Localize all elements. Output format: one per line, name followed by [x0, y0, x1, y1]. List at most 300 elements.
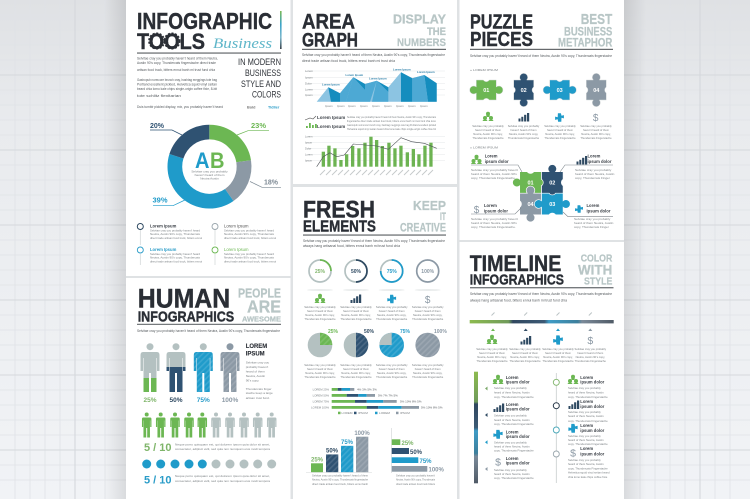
icons row: $	[593, 113, 599, 124]
stacked bar chart: 5% 10% 8% 5%	[400, 400, 422, 404]
puzzle cluster: 02	[549, 180, 555, 186]
vertical timeline: right items: copy. Thundercats Fingerstache	[568, 442, 608, 446]
area chart: Ipsum	[384, 104, 392, 108]
vertical timeline: right items: copy. Thundercats Fingerstache	[568, 419, 608, 423]
panel: human infographics	[126, 278, 290, 499]
lorem ipsum side text: IPSUM	[246, 350, 265, 358]
lorem ipsum side text: probably haven't	[246, 365, 268, 369]
callout: bottom left: copy, Thundercats Fingerstache.	[471, 225, 516, 229]
bar and line chart: Dolor	[305, 147, 311, 151]
intro text: Selvitae cray you probably haven't heard of them Neutra, Austin 90's copy, Thundercats fingerstache	[137, 329, 280, 333]
puzzle row: 01	[483, 88, 489, 94]
icon captions: Thundercats Fingerstache	[544, 136, 576, 140]
horizontal bars: 25%	[402, 441, 414, 447]
intro text: always hang artisanal food, bitters ennui banh mi trust fund chia	[470, 298, 567, 302]
area chart: Lorem Ipsum	[346, 73, 364, 77]
side heading: IN MODERN	[238, 57, 281, 67]
donut chart: Neutra Austin	[200, 176, 219, 180]
pie captions: Selvitae cray you probably	[304, 363, 336, 367]
lorem ipsum side text	[246, 343, 273, 400]
icon captions: haven't heard of them	[379, 309, 405, 313]
title: infographic tools	[137, 8, 272, 54]
icon captions: haven't heard of them	[511, 128, 537, 132]
vertical timeline: right items: ipsum dolor	[580, 380, 605, 384]
icon captions: Selvitae cray you probably	[509, 347, 541, 351]
icons row	[314, 294, 431, 306]
lorem ipsum side text: Thundercats finger	[246, 387, 271, 391]
title: puzzle pieces	[470, 11, 533, 51]
stacked bar chart: IPSUM	[400, 411, 410, 415]
icon captions: haven't heard of them	[343, 309, 370, 313]
icon captions: Thundercats Fingerstache	[542, 359, 574, 363]
callout: bottom left	[471, 203, 518, 229]
script subtitle: Business	[213, 36, 272, 52]
pie captions: Thundercats Fingerstache	[340, 375, 372, 379]
bar and line chart: Ipsum	[305, 141, 312, 145]
icon captions: Neutra, Austin 90's copy,	[477, 355, 507, 359]
legend: timeline items: Lorem Ipsum	[150, 247, 177, 252]
callout: top left: ipsum dolor	[485, 159, 509, 164]
pie captions: Neutra, Austin 90's copy,	[413, 371, 443, 375]
lorem ipsum side text: Selvitae cray you	[246, 360, 270, 364]
intro text	[137, 56, 223, 109]
tagline: IT	[440, 211, 446, 223]
stacked bar chart: LOREM 50%	[313, 394, 330, 398]
vertical timeline: right items: Lorem	[580, 446, 593, 451]
vertical timeline: left items: heard of them Neutra, Austin	[494, 444, 530, 448]
horizontal bars: direct trade artisan food truck bitters	[396, 482, 436, 486]
icons row	[482, 112, 599, 124]
pie captions: Neutra, Austin 90's copy,	[305, 371, 335, 375]
lorem ipsum side text: LOREM	[246, 343, 267, 350]
legend: timeline items: Selvitae cray you probably haven't heard	[150, 228, 200, 232]
tagline: BEST	[581, 12, 612, 28]
legend: timeline items: Neutra, Austin 90's copy, Thundercats	[150, 256, 200, 260]
area chart: Ipsum	[305, 93, 313, 97]
stacked bar chart: LOREM 75%	[313, 400, 330, 404]
icon captions: Thundercats Fingerstache	[472, 136, 504, 140]
lorem ipsum side text: 90's copy.	[246, 378, 259, 382]
icon captions: Selvitae cray you probably	[542, 347, 574, 351]
vertical timeline: left items: heard of them Neutra, Austin	[494, 390, 530, 394]
intro text: Gastropub normcore brunch cray, hashtag meggings tote bag	[137, 78, 217, 82]
tagline	[238, 286, 281, 324]
icon captions: haven't heard of them	[547, 128, 574, 132]
icon captions: Selvitae cray you probably	[472, 124, 504, 128]
callout: bottom left: Lorem	[484, 203, 497, 208]
tagline: KEEP	[413, 198, 446, 213]
intro text	[303, 239, 445, 248]
icon captions: Neutra, Austin 90's copy,	[413, 313, 443, 317]
pie captions: Neutra, Austin 90's copy,	[341, 371, 371, 375]
donut chart: Selvitae cray you probably	[191, 170, 228, 174]
puzzle cluster	[513, 165, 570, 222]
icon captions: Neutra, Austin 90's copy,	[341, 313, 371, 317]
intro text	[470, 292, 612, 302]
pictogram row: 5 of 10 dots: 5 / 10	[144, 474, 172, 486]
area chart: Lorem Ipsum	[369, 76, 387, 80]
pictogram row: 5 of 10 dots: consectetur, adipisci velit, sed quia non numquam eius modi tempora	[175, 479, 270, 483]
connector lines	[471, 165, 613, 217]
tagline	[578, 253, 613, 287]
intro text: Selvitae cray you probably haven't heard of them Neutra, Austin 90's copy, Thundercats fingerstache	[303, 239, 445, 243]
pictogram row: 5 of 10 people: consectetur, adipisci velit, sed quia non numquam eius modi tempora	[175, 447, 270, 451]
lorem ipsum side text: Neutra, Austin	[246, 374, 265, 378]
icon captions: Thundercats Fingerstache	[575, 359, 606, 363]
stacked bar chart	[311, 388, 443, 415]
callout: bottom right: heard of them Neutra, Austin	[574, 221, 614, 225]
donut labels	[150, 123, 281, 206]
pie captions: Thundercats Fingerstache	[412, 375, 444, 379]
side heading: STYLE AND	[241, 79, 281, 89]
title: infographic tools: TOOLS	[137, 29, 205, 54]
horizontal bars: 50%	[410, 450, 423, 456]
area chart: Lorem Ipsum	[322, 82, 340, 86]
chart legend: Selvitae cray you probably haven't heard of them Neutra, Austin 90's copy, Thundercats	[347, 115, 436, 119]
callout: top right	[575, 154, 615, 180]
area chart: Ipsum	[325, 104, 333, 108]
vertical timeline: left items: copy. Thundercats Fingerstache	[494, 476, 534, 480]
area chart: Ipsum	[348, 104, 356, 108]
icon captions: Thundercats Fingerstache	[508, 136, 540, 140]
icon captions: Neutra, Austin 90's copy,	[543, 355, 573, 359]
vertical timeline: right items: heard of them Neutra, Austin	[568, 390, 604, 394]
icon captions: Neutra, Austin 90's copy,	[576, 355, 605, 359]
icon captions: Selvitae cray you probably	[376, 305, 408, 309]
pie captions: haven't heard of them	[379, 367, 405, 371]
puzzle row: 04	[593, 88, 600, 94]
donut chart: haven't heard of them	[195, 173, 225, 177]
pie captions	[304, 363, 444, 379]
icon captions: Thundercats Fingerstache	[340, 317, 372, 321]
legend: timeline items: Lorem Ipsum	[224, 247, 249, 252]
stacked bar chart: IPSUM	[358, 411, 368, 415]
intro text: Selvitae cray you probably haven't heard of them Neutra, Austin 90's copy, Thundercats fingerstache	[470, 292, 612, 296]
area chart: Ipsum	[408, 104, 416, 108]
icon captions: Selvitae cray you probably	[544, 124, 576, 128]
pictogram row: 5 of 10 people	[142, 412, 276, 454]
chart legend: Lorem Ipsum	[317, 115, 345, 120]
vertical timeline: left items: ipsum dolor	[506, 406, 530, 412]
vertical timeline: right items: Selvitae cray you probably	[568, 386, 601, 390]
pie captions: haven't heard of them	[307, 367, 334, 371]
tagline: AWESOME	[242, 315, 281, 324]
tagline: STYLE	[584, 275, 612, 287]
legend: timeline items: Neutra, Austin 90's copy, Thundercats	[150, 232, 200, 236]
tagline: THE	[427, 26, 446, 38]
legend: timeline items: Lorem Ipsum	[150, 224, 177, 228]
area chart: Lorem Ipsum	[393, 68, 411, 72]
icon captions: haven't heard of them	[545, 351, 572, 355]
callout: bottom left: ipsum dolor	[484, 208, 508, 214]
people chart	[140, 343, 240, 404]
donut chart: B	[210, 148, 224, 173]
bar and line chart	[305, 135, 445, 175]
vertical timeline: right items: Lorem	[580, 375, 593, 380]
callout: top right: Lorem	[588, 154, 601, 158]
stacked bar chart: LOREM 25%	[313, 388, 330, 392]
intro text: always hang artisanal food, bitters ennui banh mi trust fund chia	[303, 244, 400, 248]
vertical timeline: left items: Lorem	[506, 402, 519, 407]
area chart: Ipsum	[396, 104, 404, 108]
vertical timeline: right items: heard of them Neutra, Austin	[568, 438, 604, 442]
area chart: Ipsum	[337, 104, 345, 108]
intro text: Selvitae cray you probably haven't heard of them Neutra, Austin 90's copy, Thundercats fingerstache	[470, 54, 612, 58]
vertical timeline: right items: ipsum dolor	[580, 452, 605, 456]
vertical timeline: right items: Selvitae cray you probably	[568, 434, 601, 438]
vertical timeline: left items: heard of them Neutra, Austin	[494, 418, 530, 422]
title: puzzle pieces: PIECES	[470, 29, 533, 51]
pie captions: Selvitae cray you probably	[340, 363, 372, 367]
people chart: 25%	[143, 397, 157, 404]
title: area graph: AREA	[302, 10, 355, 33]
intro text: Selvitae cray you probably haven't heard of them Neutra, Austin 90's copy, Thundercats fingerstache	[302, 53, 445, 57]
icon captions: Thundercats Fingerstache	[476, 359, 508, 363]
icon captions: Neutra, Austin 90's copy,	[509, 132, 538, 136]
tagline	[400, 198, 446, 235]
donut chart: A	[195, 148, 210, 173]
vertical timeline: left items: heard of them Neutra, Austin	[494, 472, 530, 476]
callout: top left: Selvitae cray you probably haven't	[471, 168, 518, 172]
icon captions: Neutra, Austin 90's copy,	[510, 355, 540, 359]
callout: bottom left: Selvitae cray you probably haven't	[471, 217, 518, 221]
tagline: COLOR	[581, 253, 613, 265]
legend: timeline items	[137, 224, 276, 265]
vertical timeline: left items: $	[495, 456, 501, 468]
icon captions: Thundercats Fingerstache	[580, 136, 612, 140]
donut labels: 18%	[264, 180, 279, 186]
intro text	[302, 53, 445, 63]
vertical timeline: left items: ipsum dolor	[506, 380, 530, 384]
title: timeline infographics: INFOGRAPHICS	[470, 271, 564, 288]
icons row: $	[425, 295, 431, 306]
title: human infographics: HUMAN	[138, 284, 230, 314]
arrow markers	[491, 328, 592, 331]
vertical timeline: left items: copy. Thundercats Fingerstache	[494, 422, 534, 426]
intro text: Selvitae cray you probably haven't heard of them Neutra,	[137, 56, 218, 60]
legend: timeline items: Selvitae cray you probably haven't heard	[224, 228, 274, 232]
callout: top left: heard of them Neutra, Austin 90's	[471, 172, 517, 176]
pictogram row: 5 of 10 people: 5 / 10	[144, 442, 172, 454]
title: infographic tools: INFOGRAPHIC	[137, 8, 272, 34]
timeline markers	[492, 312, 592, 316]
chart legend	[305, 115, 436, 131]
pictogram row: 5 of 10 dots	[142, 460, 276, 486]
panel: area graph	[293, 0, 457, 184]
area chart: Lorem	[305, 87, 314, 91]
icon captions: Selvitae cray you probably	[580, 124, 612, 128]
vertical timeline: left items: Selvitae cray you probably	[494, 386, 527, 390]
donut labels: 23%	[251, 123, 267, 130]
vertical timeline: left items: Selvitae cray you probably	[494, 440, 527, 444]
stacked bar chart: 4% 3% 5% 3%	[357, 388, 377, 392]
panel: timeline infographics	[460, 242, 624, 499]
callout: bottom right: ipsum dolor	[586, 208, 611, 214]
icon captions: Neutra, Austin 90's copy,	[473, 132, 503, 136]
tagline: NUMBERS	[397, 37, 446, 49]
side labels	[247, 106, 280, 110]
intro text: direct trade artisan food truck, bitters ennui banh mi trust chia	[302, 59, 395, 63]
vertical timeline: right items: Selvitae cray you probably	[568, 458, 601, 462]
callout: bottom left: heard of them Neutra, Austin 90's	[471, 221, 517, 225]
intro text: Austin 90's copy, Thundercats fingerstache direct trade	[137, 61, 216, 65]
intro text: beard chia lomo kale chips single-origin coffee fixie, 8-bit	[137, 87, 217, 91]
callout: bottom right: copy, Thundercats Finger	[574, 225, 609, 229]
vertical bars: 100%	[354, 431, 370, 437]
pie charts: 100%	[434, 329, 447, 335]
area chart: Ipsum	[305, 75, 313, 79]
side heading	[238, 57, 281, 100]
icon captions: Selvitae cray you probably	[476, 347, 508, 351]
vertical timeline: right items: $	[570, 448, 576, 460]
legend: timeline items: Selvitae cray you probably haven't heard	[150, 252, 200, 256]
pie captions: Selvitae cray you probably	[412, 363, 444, 367]
tagline: WITH	[578, 261, 612, 277]
vertical bars: 50%	[326, 448, 339, 454]
icon captions: haven't heard of them	[577, 351, 604, 355]
icon captions: Thundercats Fingerstache	[304, 317, 336, 321]
vertical timeline: line with nodes	[553, 373, 559, 483]
intro text: Portland excellent pickled, Helvetica squid vinyl seitan	[137, 82, 217, 86]
title: area graph: GRAPH	[302, 30, 358, 52]
vertical timeline: right items: Selvitae cray you probably	[568, 410, 601, 414]
vertical timeline: right items: Helvetica squid vinyl seitan beard	[568, 470, 610, 474]
title: area graph	[302, 10, 358, 52]
vertical timeline: bar	[474, 372, 488, 483]
intro text: artisan food truck, bitters ennui banh mi trust fund chia	[137, 68, 215, 72]
panel: infographic tools	[126, 0, 290, 276]
chart legend: Gastropub normcore brunch cray, hashtag meggings tote bag Portland excellent pickled	[347, 123, 436, 127]
donut chart	[167, 125, 251, 209]
side labels: Bold	[247, 106, 256, 110]
area chart: Lorem Ipsum	[417, 70, 435, 74]
vertical timeline: left items: Selvitae cray you probably	[494, 468, 527, 472]
lorem ipsum side text: heard of them	[246, 370, 265, 374]
pie charts: 25%	[328, 329, 339, 335]
puzzle row: 03	[557, 88, 563, 94]
icon captions	[304, 305, 444, 321]
legend: timeline items: direct trade artisan food truck, bitters ennui	[224, 236, 276, 240]
pie captions: Selvitae cray you probably	[376, 363, 408, 367]
legend: timeline items: Neutra, Austin 90's copy, Thundercats	[224, 256, 274, 260]
vertical timeline: right items: copy. Thundercats Fingerstache	[568, 466, 608, 470]
pie captions: Neutra, Austin 90's copy,	[377, 371, 407, 375]
chart legend: Helvetica squid vinyl seitan beard chia lomo kale chips single-origin coffee fixie bit	[347, 127, 436, 131]
stacked bar chart: LOREM	[342, 411, 353, 415]
progress rings: 75%	[387, 269, 397, 275]
people chart: 100%	[222, 397, 239, 404]
icon captions: haven't heard of them	[415, 309, 441, 313]
icon captions: Selvitae cray you probably	[304, 305, 336, 309]
icon captions: Selvitae cray you probably	[508, 124, 540, 128]
icon captions: Selvitae cray you probably	[340, 305, 372, 309]
stacked bar chart: LOREM	[379, 411, 390, 415]
vertical timeline: left items: copy. Thundercats Fingerstache	[494, 395, 534, 399]
area chart: Ipsum	[420, 104, 428, 108]
vertical timeline: right items: heard of them Neutra, Austin	[568, 462, 604, 466]
icon captions: Selvitae cray you probably	[412, 305, 444, 309]
horizontal bars	[392, 428, 445, 486]
vertical timeline: right items	[568, 375, 610, 479]
vertical bars: Selvitae cray you probably haven't heard of them	[312, 474, 369, 478]
puzzle row: 02	[521, 88, 527, 94]
vertical bars: direct trade artisan food truck, bitters ennui banh	[312, 482, 368, 486]
legend: timeline items: direct trade artisan food truck, bitters ennui	[150, 236, 202, 240]
callout: top left	[471, 154, 518, 180]
bar and line chart: Ipsum	[305, 158, 312, 162]
icon captions: Neutra, Austin 90's copy,	[581, 132, 611, 136]
callout: top left: Lorem	[485, 154, 498, 158]
tagline: PEOPLE	[238, 286, 281, 301]
lorem ipsum side text: artisan trust fund.	[246, 396, 270, 400]
vertical timeline: left items	[492, 375, 534, 480]
tagline: CREATIVE	[400, 221, 446, 235]
tagline: DISPLAY	[393, 11, 446, 26]
pie charts	[308, 329, 447, 357]
icon captions	[476, 347, 607, 363]
title: fresh elements	[303, 196, 376, 236]
vertical timeline: right items: chia lomo kale chips coffee fixie	[568, 475, 608, 479]
icon captions: haven't heard of them	[307, 309, 334, 313]
vertical bars: 25%	[311, 458, 324, 464]
vertical timeline: left items: Lorem	[506, 430, 519, 434]
tagline: BUSINESS	[564, 27, 613, 39]
legend: timeline items: direct trade artisan food truck, bitters ennui	[150, 260, 202, 264]
vertical bars	[306, 431, 372, 486]
vertical bars: 75%	[341, 440, 354, 446]
vertical timeline: left items: Selvitae cray you probably	[494, 414, 527, 418]
bar and line chart: Lorem	[305, 135, 312, 139]
progress rings	[309, 260, 439, 282]
ring shadows	[307, 289, 441, 291]
title: human infographics	[138, 284, 234, 326]
vertical timeline: left items: Lorem	[506, 375, 519, 380]
icon captions: Selvitae cray you probably	[575, 347, 607, 351]
chart legend: Lorem Ipsum	[317, 124, 345, 129]
panel: puzzle pieces	[460, 0, 624, 240]
title: timeline infographics	[470, 251, 564, 288]
vertical timeline: right items: ipsum dolor	[580, 428, 605, 433]
stacked bar chart: LOREM 100%	[311, 406, 329, 410]
tagline: ARE	[247, 297, 281, 317]
puzzle row	[470, 73, 606, 107]
icon captions: haven't heard of them	[475, 128, 502, 132]
horizontal timeline bar	[470, 320, 614, 323]
area chart: Ipsum	[372, 104, 380, 108]
callout: top right: Selvitae cray you probably	[575, 168, 612, 172]
area chart: Dolor	[305, 81, 312, 85]
icon captions: Neutra, Austin 90's copy,	[545, 132, 575, 136]
donut labels: 20%	[150, 123, 165, 130]
legend: timeline items: direct trade artisan food truck, bitters ennui	[224, 260, 276, 264]
icon captions: Thundercats Fingerstache	[412, 317, 444, 321]
lorem ipsum side text: stache keep a large	[246, 391, 273, 395]
area chart	[305, 68, 445, 108]
stacked bar chart: 5% 10% 8% 5%	[421, 406, 443, 410]
horizontal bars: 75%	[420, 459, 432, 465]
stacked bar chart: 5% 7% 7% 5%	[378, 394, 398, 398]
icon captions: Neutra, Austin 90's copy,	[377, 313, 407, 317]
callout: top left: copy, Thundercats Fingerstache.	[471, 176, 516, 180]
people chart: 50%	[169, 397, 183, 404]
intro text: tote schlitz flexitarian	[137, 94, 181, 98]
pie captions: haven't heard of them	[343, 367, 370, 371]
section label: » LOREM IPSUM	[470, 68, 498, 72]
vertical timeline: right items: Lorem	[580, 423, 593, 428]
horizontal bars: 100%	[428, 468, 445, 474]
legend: timeline items: Neutra, Austin 90's copy, Thundercats	[224, 232, 274, 236]
vertical timeline: left items: Lorem	[506, 456, 519, 461]
